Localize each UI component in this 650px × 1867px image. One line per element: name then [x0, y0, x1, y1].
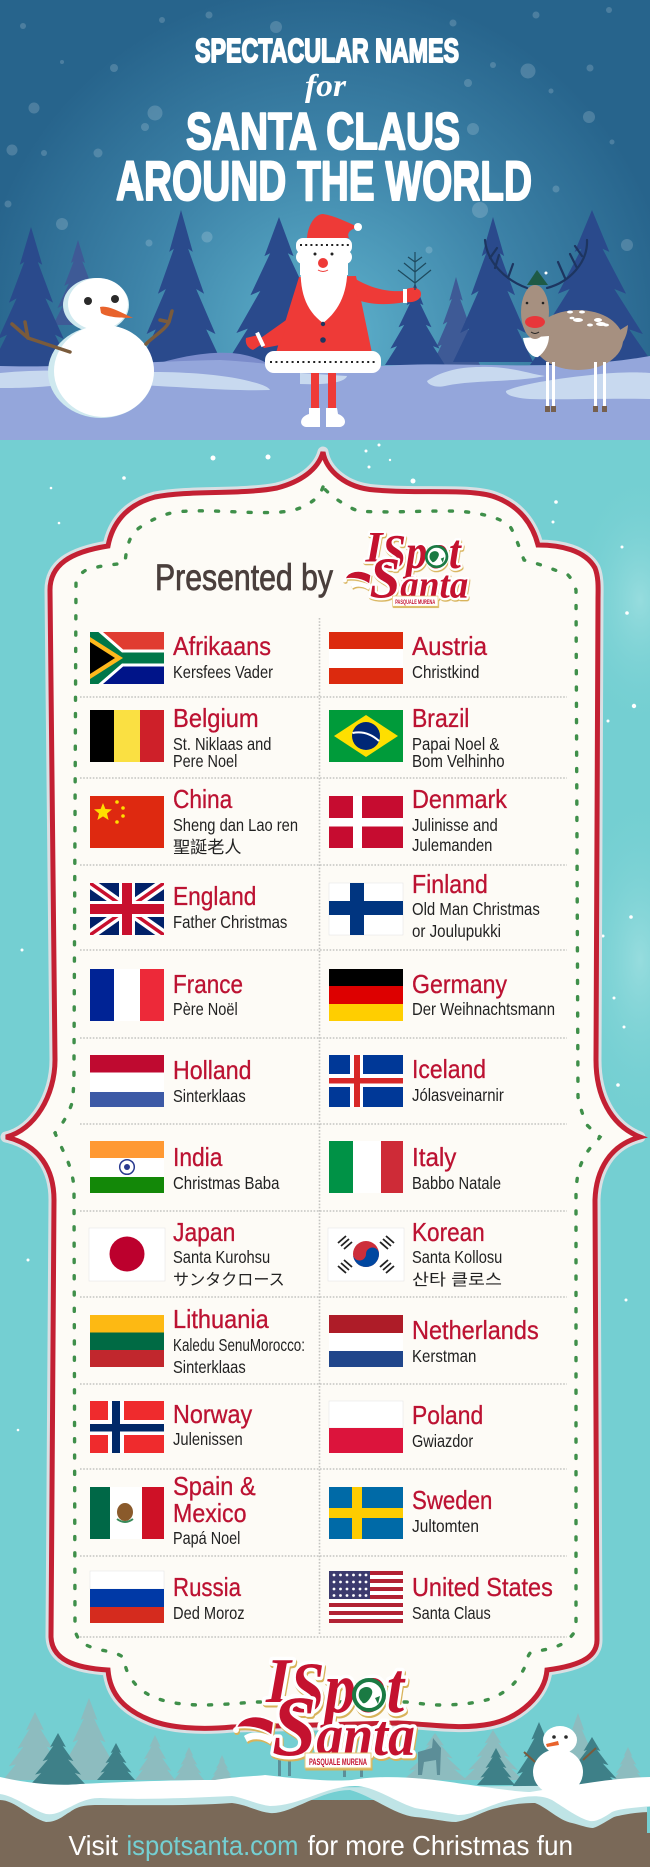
santa name: Papá Noel	[173, 1528, 240, 1548]
flag: Japan	[89, 1228, 165, 1281]
logo plaque: PASQUALE MURENA	[309, 1757, 367, 1768]
logo hat	[233, 1716, 274, 1744]
name	[173, 1471, 256, 1528]
row: India	[90, 1141, 280, 1193]
santa name: Kaledu SenuMorocco:	[173, 1335, 305, 1355]
row: Netherlands	[329, 1315, 539, 1367]
stick arms	[12, 311, 172, 352]
santa name: 산타 클로스	[412, 1271, 502, 1289]
flag: Austria	[329, 632, 403, 684]
santa name: Der Weihnachtsmann	[412, 999, 555, 1019]
name: Poland	[412, 1400, 483, 1430]
row: Italy	[329, 1141, 501, 1193]
santa name	[173, 815, 298, 857]
row: Korean	[328, 1217, 502, 1289]
title line 3: SANTA CLAUS	[186, 103, 460, 161]
row: Denmark	[329, 784, 508, 855]
santa name: 聖誕老人	[173, 838, 242, 857]
name: Germany	[412, 969, 507, 999]
santa name	[412, 815, 498, 855]
name: Mexico	[173, 1498, 246, 1528]
name: England	[173, 881, 256, 911]
row: Holland	[90, 1055, 252, 1107]
row: China	[90, 784, 298, 857]
row: Poland	[329, 1400, 483, 1453]
flag: Denmark	[329, 796, 403, 848]
flag: India	[90, 1141, 164, 1193]
row: United States	[329, 1571, 553, 1623]
santa name: Old Man Christmas	[412, 899, 540, 919]
teal page background	[0, 440, 650, 1867]
santa name	[412, 899, 540, 941]
footer text: visit: Visit	[68, 1830, 118, 1861]
footer call to action	[68, 1830, 573, 1861]
frame fill and red border	[6, 452, 640, 1728]
row: Lithuania	[90, 1304, 305, 1377]
winter scene header	[0, 0, 650, 440]
santa	[246, 214, 431, 427]
santa name: or Joulupukki	[412, 921, 501, 941]
name: Denmark	[412, 784, 508, 814]
flag: Poland	[329, 1401, 403, 1453]
flag: Brazil	[329, 710, 403, 762]
row: England	[90, 881, 288, 935]
santa name	[173, 1335, 305, 1377]
title line 2: for	[305, 67, 347, 103]
logo globe	[354, 1680, 384, 1710]
santa name: Papai Noel &	[412, 734, 500, 754]
flag: Mexico	[90, 1487, 164, 1539]
flag: France	[90, 969, 164, 1021]
name: Italy	[412, 1142, 456, 1172]
bottom landscape	[0, 1698, 650, 1867]
row: Germany	[329, 969, 555, 1021]
ornamental frame panel	[6, 452, 640, 1728]
logo globe	[426, 546, 447, 567]
santa name: Santa Claus	[412, 1603, 491, 1623]
santa name: Jólasveinarnir	[412, 1085, 504, 1105]
name: Netherlands	[412, 1315, 539, 1345]
santa name: Gwiazdor	[412, 1431, 473, 1451]
flag: Italy	[329, 1141, 403, 1193]
name: Korean	[412, 1217, 485, 1247]
row: France	[90, 969, 243, 1021]
santa name: St. Niklaas and	[173, 734, 271, 754]
falling snow dots	[4, 7, 633, 254]
icicle shadow	[0, 1785, 650, 1828]
row: Russia	[90, 1571, 245, 1623]
santa name: Sinterklaas	[173, 1357, 246, 1377]
logo plaque	[305, 1753, 371, 1768]
name: Russia	[173, 1572, 241, 1602]
reindeer silhouettes	[278, 1738, 441, 1777]
name: Sweden	[412, 1485, 492, 1515]
night sky	[0, 0, 650, 440]
name: France	[173, 969, 243, 999]
name: Norway	[173, 1399, 252, 1429]
row: Japan	[89, 1217, 285, 1289]
logo letter I: I	[265, 1645, 293, 1716]
name: Spain &	[173, 1471, 256, 1501]
snowy ground	[0, 353, 650, 440]
flag: Norway	[90, 1401, 164, 1453]
santa name: Sheng dan Lao ren	[173, 815, 298, 835]
logo word Santa: Santa	[272, 1678, 415, 1774]
santa name	[173, 734, 271, 771]
santa name: サンタクロース	[173, 1271, 285, 1289]
row: Brazil	[329, 703, 505, 771]
name: Finland	[412, 869, 488, 899]
flag: South Africa	[90, 632, 164, 684]
logo word Spot: Spot	[290, 1648, 406, 1728]
row: Iceland	[329, 1054, 504, 1107]
frame outer shadow	[6, 452, 640, 1728]
front trees	[0, 210, 650, 367]
coat trim	[265, 351, 381, 373]
footer text: rest: for more Christmas fun	[308, 1830, 573, 1861]
santa name: Santa Kollosu	[412, 1247, 502, 1267]
flag: Lithuania	[90, 1315, 164, 1367]
santa name: Julemanden	[412, 835, 492, 855]
carrot nose	[100, 307, 133, 318]
santa name: Julinisse and	[412, 815, 498, 835]
logo: I Spot Santa (small)	[343, 524, 468, 610]
name: Austria	[412, 631, 487, 661]
brown earth	[0, 1800, 650, 1867]
name: Afrikaans	[173, 631, 271, 661]
back trees	[53, 240, 480, 365]
flag: Iceland	[329, 1055, 403, 1107]
name: India	[173, 1142, 223, 1172]
name: United States	[412, 1572, 553, 1602]
flag: Russia	[90, 1571, 164, 1623]
dark trees	[30, 1722, 622, 1789]
name: Iceland	[412, 1054, 486, 1084]
flag: China	[90, 796, 164, 848]
santa name: Ded Moroz	[173, 1603, 245, 1623]
green dashed border	[55, 487, 600, 1705]
row: Spain and Mexico	[90, 1471, 256, 1548]
logo word Spot: Spot	[382, 524, 462, 579]
flag: Germany	[329, 969, 403, 1021]
beard	[301, 262, 347, 323]
flag: Belgium	[90, 710, 164, 762]
santa name: Bom Velhinho	[412, 751, 505, 771]
flag: Finland	[329, 883, 403, 935]
faded trees	[3, 1698, 643, 1780]
reindeer	[485, 240, 628, 412]
row: Sweden	[329, 1485, 492, 1539]
name: Belgium	[173, 703, 259, 733]
santa name: Christkind	[412, 662, 479, 682]
flag: South Korea	[328, 1228, 404, 1281]
santa name	[412, 1247, 502, 1289]
santa name: Father Christmas	[173, 912, 288, 932]
santa name: Christmas Baba	[173, 1173, 280, 1193]
santa name: Jultomten	[412, 1516, 479, 1536]
title	[116, 32, 532, 212]
santa name: Sinterklaas	[173, 1086, 246, 1106]
hat	[307, 214, 358, 238]
logo: I Spot Santa (large)	[233, 1645, 415, 1774]
sapling	[398, 252, 431, 290]
flag: Sweden	[329, 1487, 403, 1539]
flag: Holland	[90, 1055, 164, 1107]
row: Belgium	[90, 703, 271, 771]
logo hat	[343, 571, 371, 590]
row: Austria	[329, 631, 487, 684]
footer link: ispotsanta.com	[126, 1830, 298, 1861]
row: Norway	[90, 1399, 252, 1453]
name: Holland	[173, 1055, 252, 1085]
legs and boots	[311, 373, 319, 409]
dotted grid lines	[80, 618, 567, 1637]
row: Finland	[329, 869, 540, 941]
santa name: Babbo Natale	[412, 1173, 501, 1193]
flag: Netherlands	[329, 1315, 403, 1367]
santa name: Kersfees Vader	[173, 662, 273, 682]
logo letter I: I	[365, 524, 385, 571]
flag: United Kingdom	[90, 883, 164, 935]
flag: United States	[329, 1571, 403, 1623]
arms	[258, 318, 289, 348]
name: Lithuania	[173, 1304, 269, 1334]
santa name: Santa Kurohsu	[173, 1247, 270, 1267]
bottom snowman	[524, 1726, 596, 1795]
heading: presented by: Presented by	[155, 557, 333, 598]
name: China	[173, 784, 233, 814]
logo plaque: PASQUALE MURENA	[395, 599, 435, 606]
santa name: Père Noël	[173, 999, 238, 1019]
name: Japan	[173, 1217, 235, 1247]
name: Brazil	[412, 703, 469, 733]
title line 1: SPECTACULAR NAMES	[195, 32, 459, 69]
santa name	[412, 734, 505, 771]
snow bank	[0, 1775, 650, 1821]
santa name	[173, 1247, 285, 1289]
logo word Santa: Santa	[370, 546, 468, 610]
santa name: Pere Noel	[173, 751, 237, 771]
santa name: Julenissen	[173, 1429, 243, 1449]
row: Afrikaans	[90, 631, 273, 684]
snowman	[12, 278, 172, 418]
santa name: Kerstman	[412, 1346, 476, 1366]
